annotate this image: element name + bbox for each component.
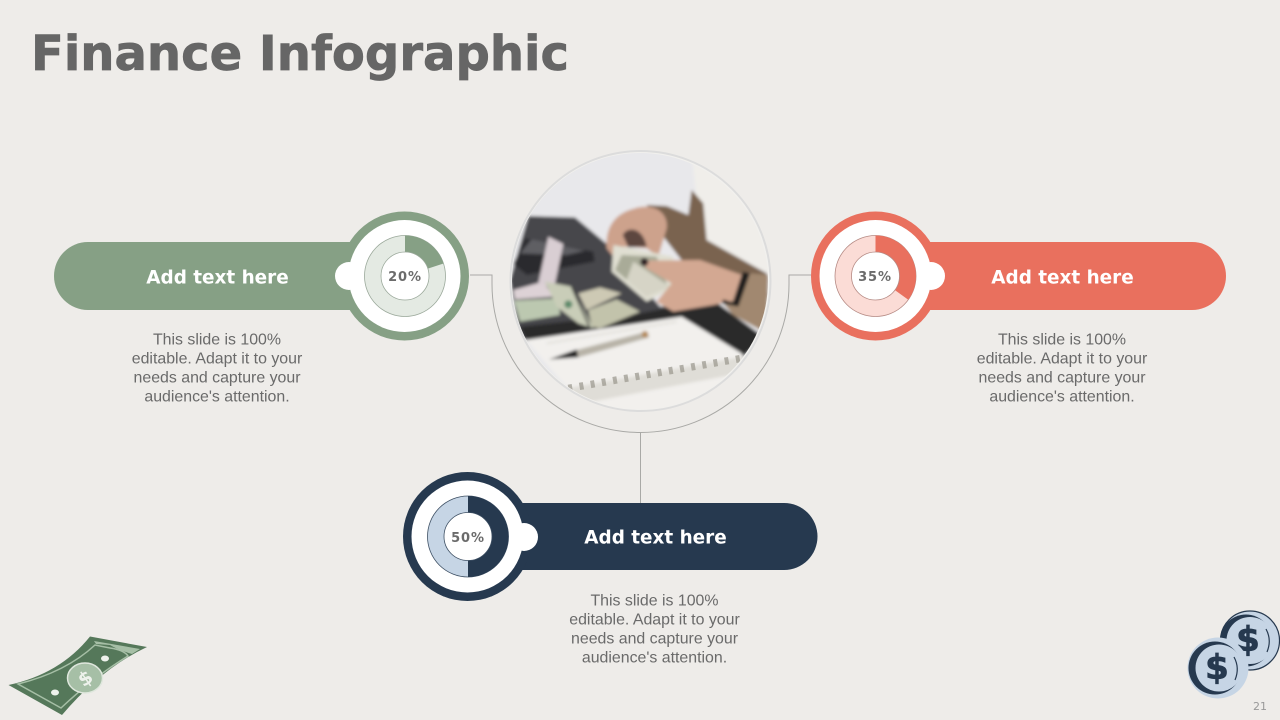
right description: editable. Adapt it to your [977, 350, 1148, 368]
left bar [54, 242, 380, 310]
left description: editable. Adapt it to your [132, 350, 303, 368]
left donut chart 20% [364, 236, 446, 316]
white sweater [692, 153, 780, 280]
right coin [1220, 611, 1280, 670]
paper money [513, 282, 553, 299]
left description: needs and capture your [134, 370, 301, 386]
panel: left item, 20% [54, 212, 469, 406]
right donut chart 35% [835, 236, 916, 316]
bottom description: editable. Adapt it to your [569, 612, 740, 628]
bottom ring [403, 472, 532, 601]
title: Finance Infographic [31, 26, 569, 82]
left ring [340, 212, 469, 340]
bottom description: audience's attention. [582, 650, 727, 666]
dark table [510, 216, 763, 357]
bottom description: needs and capture your [571, 630, 739, 648]
phone [513, 238, 595, 275]
banknote stack [612, 245, 673, 302]
icon: dollar coins [1188, 611, 1280, 698]
left heading: Add text here [146, 268, 289, 288]
left description: audience's attention. [144, 388, 290, 406]
notebook [528, 314, 745, 409]
bottom description [569, 592, 740, 666]
watch [722, 272, 750, 307]
icon: banknote [8, 636, 147, 715]
left description [132, 332, 303, 406]
bottom heading: Add text here [584, 528, 727, 548]
left description: This slide is 100% [153, 332, 281, 348]
left percentage: 20% [388, 270, 422, 285]
page number: 21 [1253, 700, 1267, 713]
right ring [811, 212, 940, 340]
brown sleeve and arm [647, 190, 768, 300]
right description: audience's attention. [989, 388, 1135, 406]
connector lines [470, 275, 811, 503]
bottom donut chart 50% [428, 496, 508, 577]
bottom bar [492, 503, 818, 570]
photo: hands counting money [510, 150, 772, 412]
panel: right item, 35% [811, 212, 1226, 406]
right description: needs and capture your [979, 370, 1146, 386]
pen [577, 332, 649, 357]
lower hand [640, 260, 742, 312]
right description [977, 332, 1148, 406]
bottom percentage: 50% [451, 531, 485, 546]
right heading: Add text here [991, 268, 1134, 288]
bottom description: This slide is 100% [590, 592, 719, 610]
icon: dollar coins: $ [1236, 620, 1260, 660]
panel: bottom item, 50% [403, 472, 818, 666]
right bar [900, 242, 1226, 310]
icon: dollar coins: $ [1205, 648, 1229, 688]
right percentage: 35% [858, 270, 892, 285]
icon: banknote: $ [74, 666, 97, 692]
right description: This slide is 100% [998, 332, 1126, 348]
left coin [1188, 638, 1248, 698]
upper hand [607, 207, 667, 257]
